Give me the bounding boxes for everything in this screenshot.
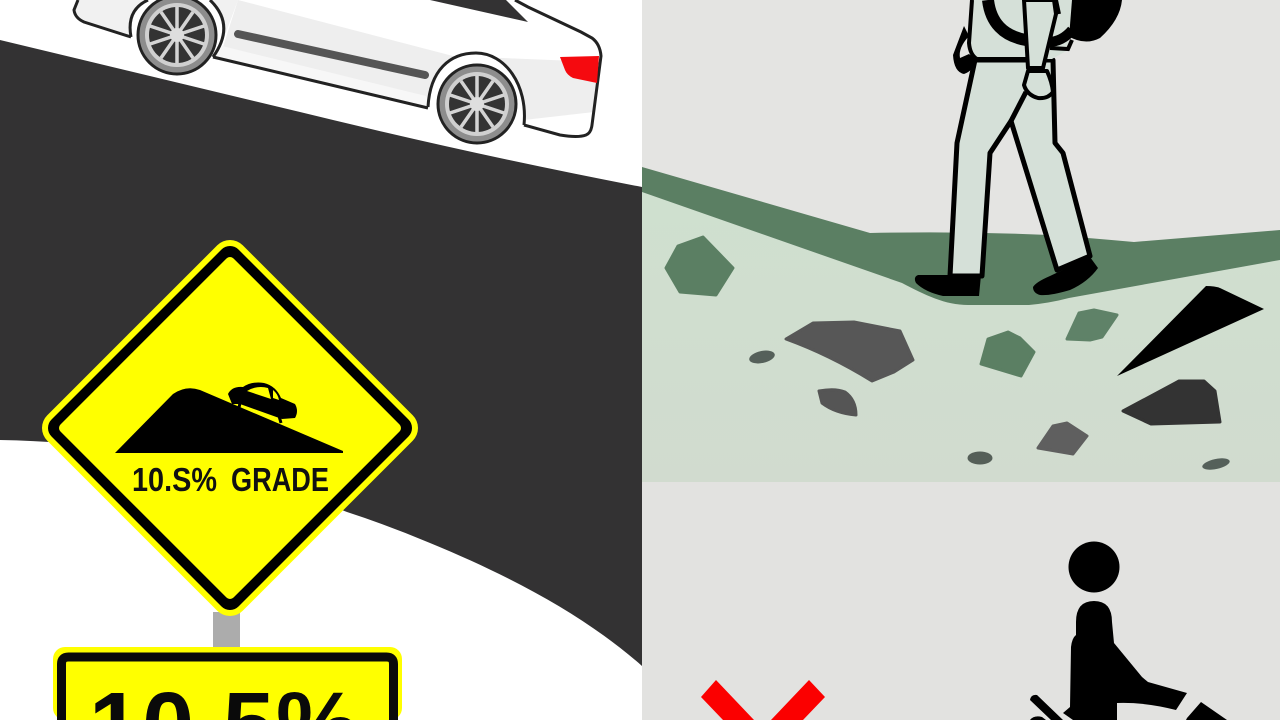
sign text [132,461,329,498]
rear arm [953,26,977,74]
dark road slope [0,40,642,666]
tail light [560,56,599,83]
inner thigh line [1011,92,1026,121]
wheel arches [130,0,524,125]
lower panel background [642,482,1280,720]
backpack [1060,0,1122,42]
front arm [1024,0,1056,68]
hand [1024,71,1053,98]
shoulder strap [988,0,1026,40]
panel: walker on rough ground [642,0,1280,720]
red cross [701,680,825,720]
rear wheel [438,65,516,143]
white car [74,0,601,143]
front wheel [138,0,216,74]
rocks [666,237,1264,472]
rectangular grade plate [53,647,402,720]
torso [968,0,1072,59]
walking cane [1030,695,1063,720]
hill icon [115,388,343,453]
shoes [915,275,981,296]
sign text: GRADE [231,461,329,498]
diamond warning sign [60,258,400,598]
side strip [238,34,425,75]
rear window [430,0,528,22]
walking figure icon [1030,542,1227,720]
light ground [642,192,1280,482]
figure foot [1186,702,1227,720]
sign post [213,612,240,650]
hiker [915,0,1122,296]
small car icon [228,382,297,423]
green path band [642,167,1280,305]
panel: steep road [0,0,642,720]
legs [950,60,1090,276]
sign text: 10.S% [132,461,217,498]
